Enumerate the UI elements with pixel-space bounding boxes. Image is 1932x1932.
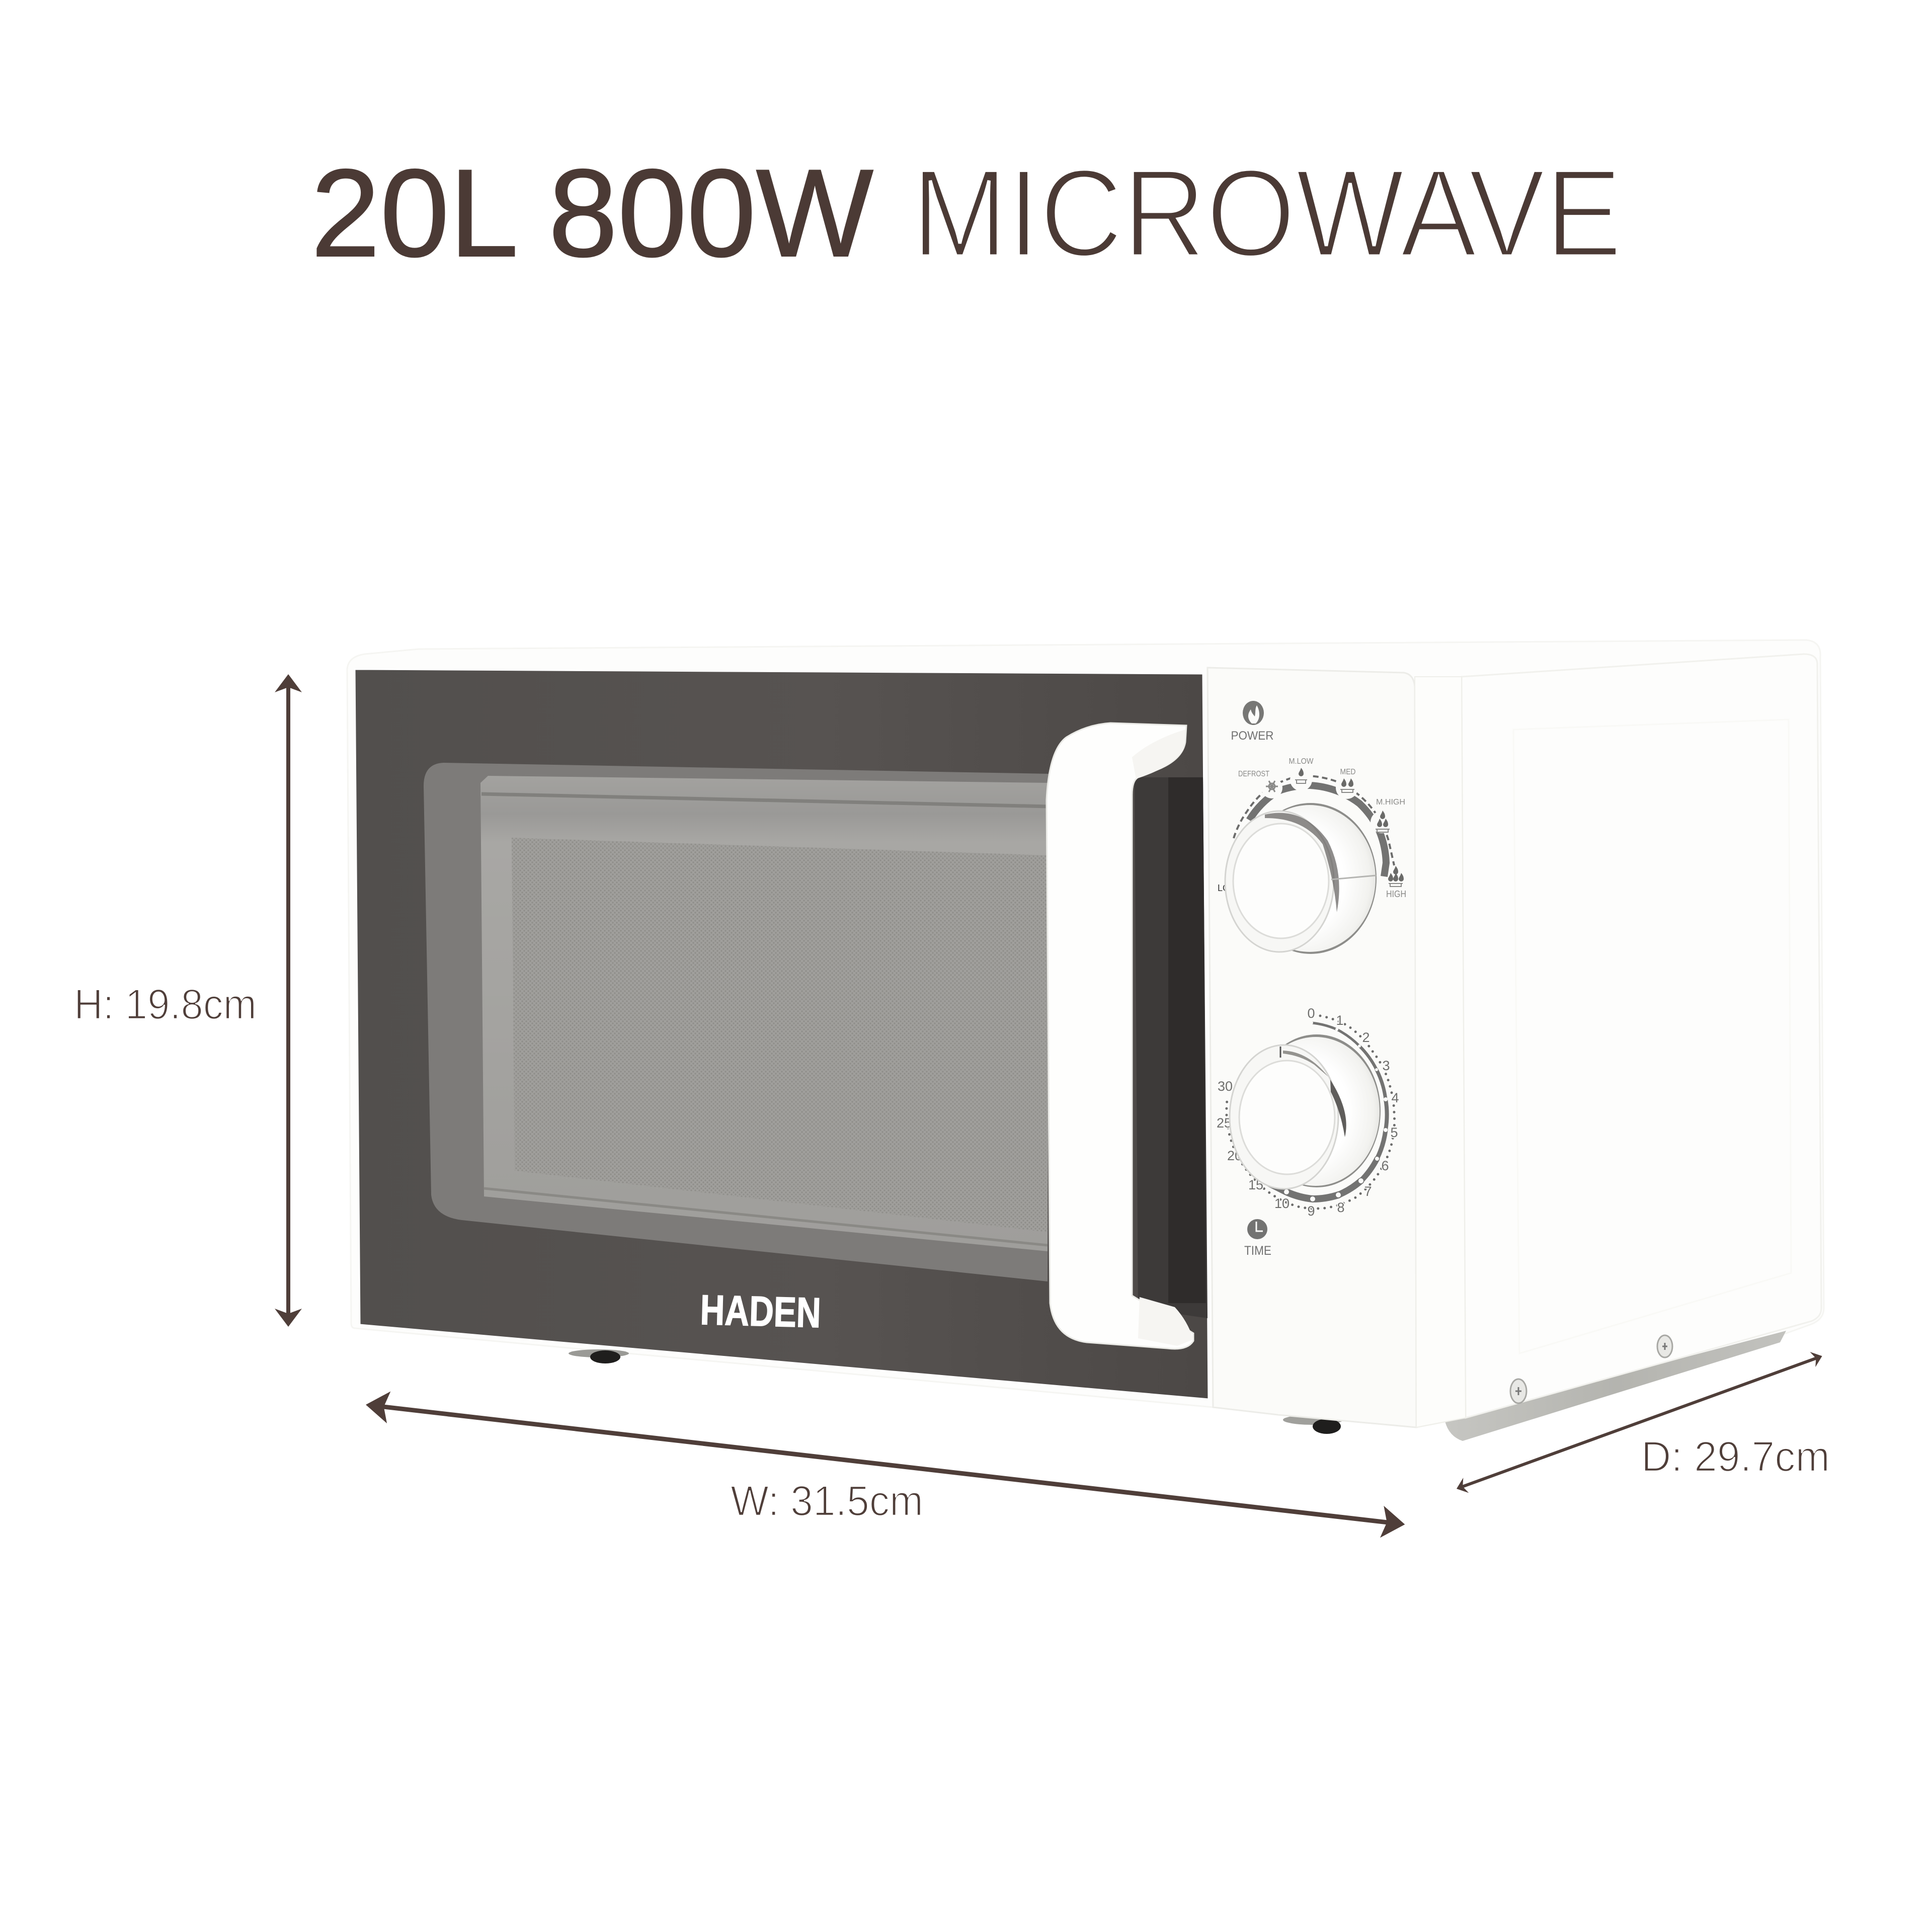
timer numbers: 20 — [1227, 1148, 1242, 1163]
timer solid arc — [1269, 1023, 1387, 1199]
timer chrome streak — [1283, 1051, 1328, 1077]
door glass — [355, 669, 1209, 1399]
time label: TIME — [1244, 1244, 1271, 1258]
power dashed arc — [1234, 776, 1394, 865]
microwave — [347, 640, 1824, 1441]
handle bottom cap shading — [1138, 1297, 1193, 1346]
arrow: width — [364, 1389, 1407, 1541]
logo: HADEN — [700, 1286, 822, 1336]
timer numbers: 10 — [1274, 1196, 1290, 1211]
power labels: HIGH — [1386, 889, 1406, 899]
window inner — [480, 776, 1050, 1251]
power labels: MED — [1340, 768, 1355, 776]
side panel — [1462, 654, 1821, 1418]
timer outer dots — [1227, 1016, 1395, 1209]
grey base tray — [1445, 1331, 1786, 1441]
timer numbers: 25 — [1217, 1115, 1232, 1131]
timer numbers: 0 — [1307, 1006, 1315, 1021]
foot: front — [1283, 1415, 1343, 1434]
screw: front — [1510, 1379, 1526, 1403]
power dial scale — [1218, 757, 1406, 899]
med icon — [1340, 778, 1354, 792]
timer numbers: 9 — [1307, 1203, 1315, 1219]
power solid arc — [1249, 785, 1386, 876]
knob face — [1233, 824, 1329, 938]
power knob — [1225, 803, 1377, 954]
high icon — [1388, 866, 1404, 887]
microwave body silhouette — [347, 640, 1824, 1427]
timer dial scale — [1217, 1006, 1399, 1219]
power labels: LOW — [1218, 883, 1238, 893]
time icon — [1247, 1219, 1267, 1239]
foot: rear — [569, 1349, 629, 1363]
timer numbers: 7 — [1364, 1184, 1372, 1199]
timer chrome reflection — [1330, 1080, 1346, 1137]
window bottom ridge — [484, 1188, 1048, 1245]
panel face — [1208, 668, 1416, 1427]
handle — [1046, 723, 1193, 1349]
control panel — [1208, 668, 1466, 1427]
defrost icon — [1266, 781, 1278, 792]
knob rim — [1225, 811, 1334, 952]
arrow: height — [275, 674, 302, 1327]
timer arc dots — [1284, 1021, 1388, 1201]
screw: rear — [1657, 1335, 1672, 1357]
timer numbers: 5 — [1390, 1125, 1398, 1140]
timer numbers: 15 — [1248, 1177, 1263, 1192]
timer numbers — [1217, 1006, 1399, 1219]
side panel embossed area — [1513, 719, 1791, 1353]
knob pointer — [1331, 875, 1376, 879]
perforated mesh — [512, 838, 1048, 1232]
timer numbers: 1 — [1336, 1013, 1344, 1028]
timer pointer — [1280, 1046, 1281, 1058]
timer knob — [1230, 1034, 1381, 1189]
title: 20L 800W — [311, 143, 873, 283]
m.low icon — [1295, 768, 1307, 783]
title — [311, 143, 1622, 283]
panel side strip — [1415, 677, 1466, 1427]
window outer — [424, 763, 1050, 1281]
title: MICROWAVE — [912, 143, 1622, 283]
timer numbers: 3 — [1382, 1058, 1390, 1073]
knob shadow — [1245, 803, 1377, 954]
depth label: D: 29.7cm — [1641, 1433, 1830, 1480]
timer knob body — [1252, 1037, 1380, 1186]
timer knob rim — [1230, 1045, 1338, 1189]
power labels: M.LOW — [1289, 757, 1314, 766]
power labels — [1218, 757, 1406, 899]
power icon — [1243, 701, 1264, 725]
arrow: depth — [1454, 1348, 1825, 1496]
door — [355, 669, 1209, 1399]
power labels: M.HIGH — [1376, 798, 1405, 807]
width label: W: 31.5cm — [731, 1477, 923, 1524]
power labels: DEFROST — [1238, 770, 1269, 778]
chrome reflection — [1265, 813, 1339, 912]
window ridge — [481, 794, 1050, 807]
timer numbers: 4 — [1391, 1090, 1399, 1105]
dark strip beside handle — [1135, 777, 1208, 1318]
timer numbers: 30 — [1218, 1079, 1233, 1094]
handle top cap shading — [1132, 730, 1185, 779]
handle body — [1046, 723, 1193, 1349]
darker strip right — [1168, 777, 1206, 1303]
timer knob shadow — [1253, 1034, 1381, 1187]
knob body — [1244, 805, 1376, 952]
height label: H: 19.8cm — [74, 981, 257, 1028]
timer knob face — [1239, 1061, 1335, 1174]
m.high icon — [1376, 811, 1390, 832]
timer numbers: 2 — [1362, 1030, 1370, 1045]
dial notches — [1261, 769, 1393, 833]
timer numbers: 6 — [1381, 1158, 1389, 1173]
power label: POWER — [1231, 729, 1274, 743]
timer numbers: 8 — [1337, 1200, 1345, 1215]
